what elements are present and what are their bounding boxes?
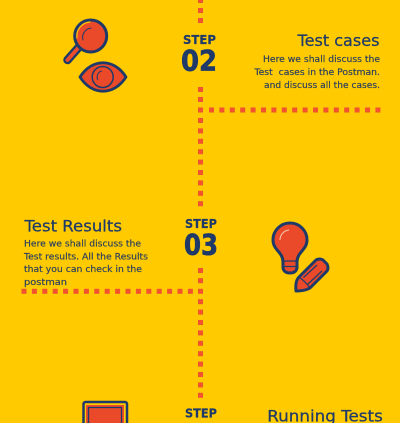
icon: magnifying glass — [68, 20, 107, 60]
dotted line: vertical timeline — [198, 0, 203, 398]
text block: test results: that you can check in the — [24, 265, 142, 275]
icon: pencil — [296, 259, 328, 291]
step 03 label: STEP — [185, 216, 217, 231]
text block: test cases — [253, 31, 380, 91]
text block: test results: Test Results — [23, 217, 122, 236]
icon: light bulb — [273, 223, 307, 273]
text block: test results: Test results. All the Results — [23, 252, 148, 262]
step 03 label: 03 — [184, 229, 218, 262]
text block: test results: Here we shall discuss the — [24, 240, 141, 250]
dotted line: branch to test cases — [209, 108, 380, 112]
text block: test cases: Test cases — [296, 31, 380, 50]
icon: square document — [84, 402, 127, 423]
step 03 label — [184, 216, 218, 262]
step 02 label: STEP — [183, 32, 216, 47]
text block: test cases: Test cases in the Postman. — [253, 68, 380, 78]
step 02 label — [181, 32, 217, 78]
icon: eye — [80, 63, 126, 91]
dotted line: branch to test results — [22, 289, 193, 294]
text block: test results: postman — [24, 278, 67, 288]
step 02 label: 02 — [181, 45, 217, 78]
text block: test cases: Here we shall discuss the — [263, 55, 380, 65]
text block: test cases: and discuss all the cases. — [264, 81, 380, 91]
step 04 label: STEP — [185, 406, 217, 421]
text block: test results — [23, 217, 148, 288]
